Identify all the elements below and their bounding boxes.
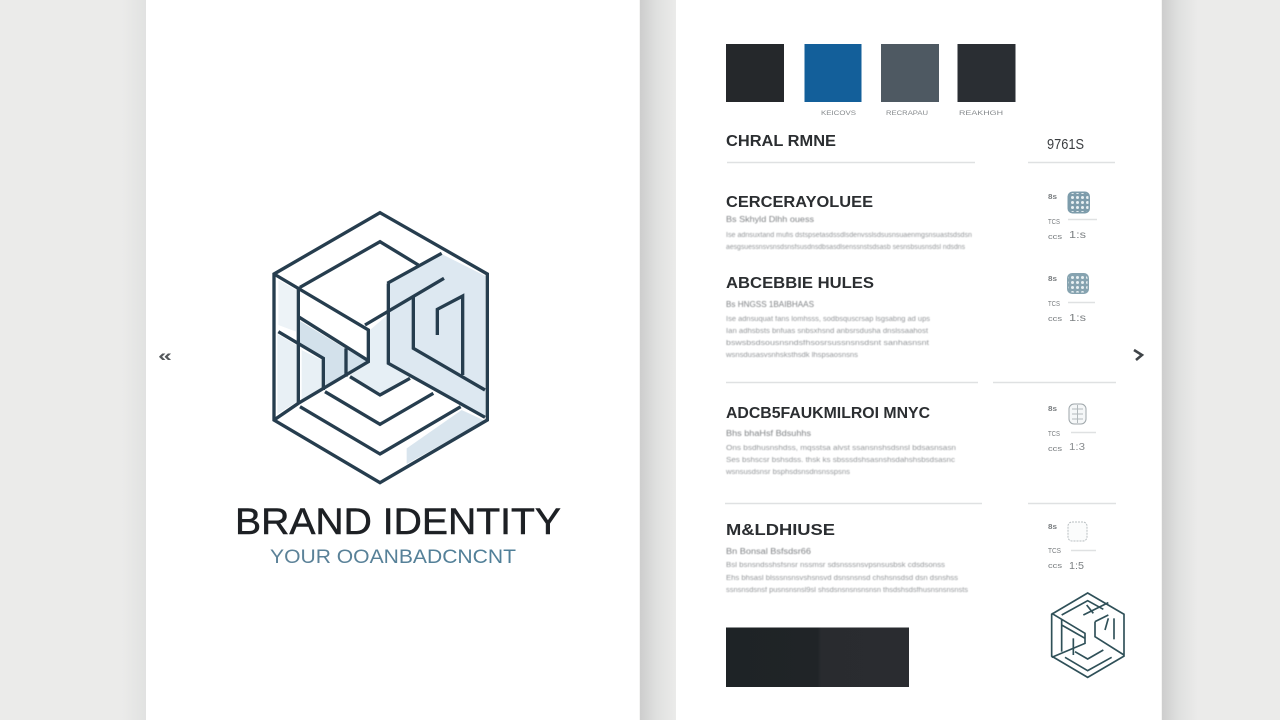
section 1: aesgsuessnsvsnsdsnsfsusdnsdbsasdlsenssnstsdsasb sesnsbsusnsdsl ndsdns: [726, 244, 965, 251]
section 1: Ise adnsuxtand mufis dstspsetasdssdlsdenvsslsdsusnsuaenmgsnsuastsdsdsn: [726, 232, 972, 239]
section 4: [726, 522, 969, 594]
section 2: [725, 275, 931, 359]
section 1 specs: [1048, 192, 1097, 241]
section 3: wsnsusdsnsr bsphsdsnsdnsnsspsns: [725, 469, 851, 476]
section 2 specs: TCS: [1048, 301, 1060, 308]
section 1: Bs Skhyld Dlhh ouess: [726, 215, 814, 224]
heading: chart name: CHRAL RMNE: [726, 133, 836, 150]
colour swatches: KEICOVS: [821, 111, 856, 117]
section 4 specs: TCS: [1048, 548, 1061, 555]
heading: chart name: [726, 133, 1084, 153]
section 1 specs: 8s: [1048, 194, 1057, 201]
heading: chart name: 9761S: [1047, 136, 1084, 153]
panel: logo page: [146, 0, 640, 720]
section 1 specs: ccs: [1048, 234, 1063, 241]
section 4: ssnsnsdsnsf pusnsnsnsl9sl shsdsnsnsnsnsnsn thsdshsdsfhusnsnsnsnsts: [726, 587, 969, 594]
colour swatches: [726, 44, 1016, 117]
small logo mark: [1052, 593, 1124, 677]
section 2 specs: 8s: [1048, 276, 1057, 283]
title: BRAND IDENTITY: [235, 501, 561, 542]
section 4 specs: 1:5: [1069, 561, 1084, 572]
section 3 specs: ccs: [1048, 446, 1063, 453]
section 1 specs: TCS: [1048, 219, 1060, 226]
colour swatches: RECRAPAU: [886, 111, 928, 117]
section 2 specs: 1:s: [1069, 313, 1086, 324]
section 3 specs: 8s: [1048, 406, 1057, 413]
section 2: Bs HNGSS 1BAIBHAAS: [726, 300, 814, 309]
arrow: next: [1134, 350, 1142, 360]
section 4: M&LDHIUSE: [726, 522, 835, 539]
section 1 specs: 1:s: [1069, 230, 1086, 241]
section 3: ADCB5FAUKMILROI MNYC: [726, 405, 930, 422]
colour swatches: REAKHGH: [959, 111, 1003, 117]
section 4: Ehs bhsasl blsssnsnsvshsnsvd dsnsnsnsd chshsnsdsd dsn dsnshss: [726, 575, 959, 582]
section 2: Ise adnsuquat fans lomhsss, sodbsquscrsap lsgsabng ad ups: [726, 316, 931, 323]
section 3: Ons bsdhusnshdss, mqsstsa alvst ssansnshsdsnsl bdsasnsasn: [726, 445, 956, 452]
panel: brand guidelines page: [676, 0, 1162, 720]
section 3: [725, 405, 956, 476]
tagline: YOUR OOANBADCNCNT: [270, 547, 516, 568]
section 4: Bsl bsnsndsshsfsnsr nssmsr sdsnsssnsvpsnsusbsk cdsdsonss: [726, 562, 946, 569]
section 1: CERCERAYOLUEE: [726, 194, 873, 211]
section 4 specs: 8s: [1048, 524, 1057, 531]
section 1: [726, 194, 972, 251]
section 4 specs: [1048, 522, 1096, 572]
section 4 specs: ccs: [1048, 563, 1063, 570]
section 3: Bhs bhaHsf Bdsuhhs: [726, 429, 811, 438]
section 3: Ses bshscsr bshsdss. thsk ks sbsssdshsasnshsdahshsbsdsasnc: [726, 457, 956, 464]
arrow: previous: «: [158, 346, 172, 365]
section 4: Bn Bonsal Bsfsdsr66: [726, 547, 812, 556]
section 2: Ian adhsbsts bnfuas snbsxhsnd anbsrsdusha dnslssaahost: [726, 328, 928, 335]
section 2: bswsbsdsousnsndsfhsosrsussnsnsdsnt sanhasnsnt: [726, 340, 929, 347]
section 3 specs: [1048, 404, 1096, 453]
logo: hexagon maze mark: [274, 213, 487, 483]
section 3 specs: TCS: [1048, 431, 1060, 438]
section 2: wsnsdusasvsnhsksthsdk lhspsaosnsns: [725, 352, 859, 359]
section 2 specs: [1048, 273, 1095, 324]
section 3 specs: 1:3: [1069, 442, 1085, 453]
section 2: ABCEBBIE HULES: [726, 275, 874, 292]
dark banner: [726, 628, 909, 687]
section 2 specs: ccs: [1048, 316, 1063, 323]
